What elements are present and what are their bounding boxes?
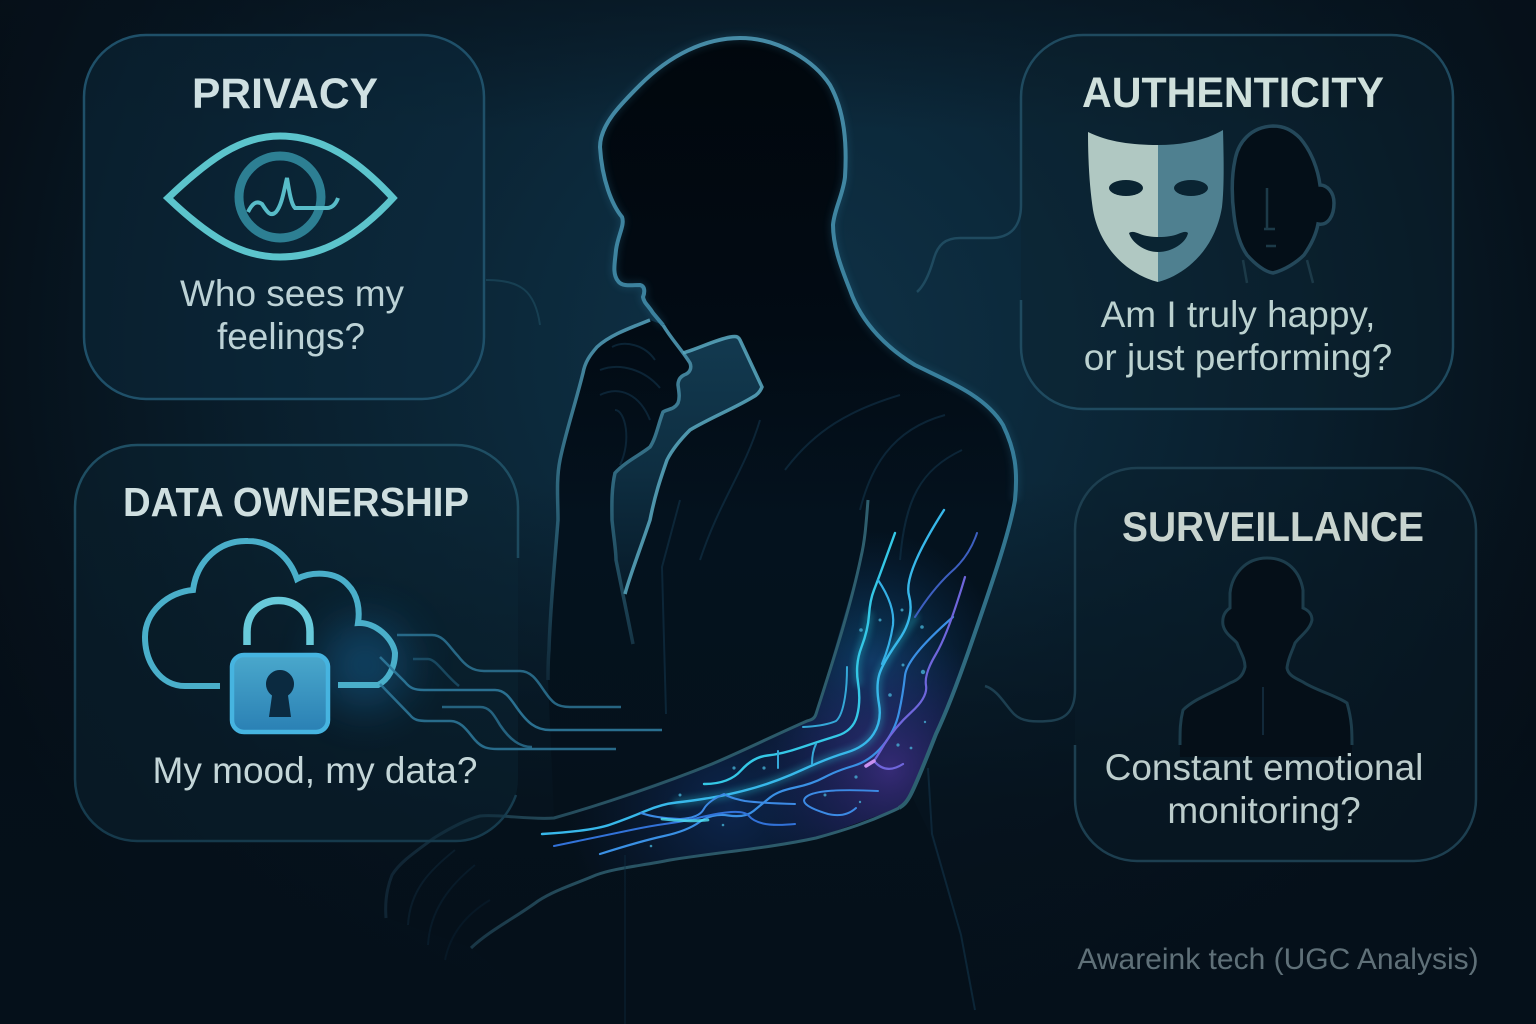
body fill — [386, 38, 1016, 1024]
forearm colour wash — [600, 550, 976, 868]
data lines — [380, 635, 662, 749]
credit: Awareink tech (UGC Analysis) — [1077, 943, 1479, 976]
heading: surveillance: SURVEILLANCE — [1122, 503, 1424, 550]
horizontal branches — [641, 790, 878, 819]
panel: authenticity — [917, 35, 1453, 409]
fingers — [612, 325, 691, 644]
text: am I truly happy: or just performing? — [1084, 337, 1392, 378]
cloud glow — [320, 620, 410, 710]
panel outline with connector — [985, 468, 1476, 861]
lower branches — [554, 812, 795, 846]
text: who sees my feelings: Who sees my — [180, 273, 405, 314]
neck and collar outline — [625, 336, 762, 594]
panel: data ownership — [75, 445, 518, 841]
outline glow — [600, 38, 1016, 500]
panel outline with connector — [917, 35, 1453, 409]
top darkening — [0, 0, 1536, 130]
icon: eye with pulse — [168, 136, 393, 257]
icon: watched figure — [1180, 558, 1352, 757]
panel: privacy — [84, 35, 484, 399]
cyan branch — [878, 580, 893, 664]
second cyan vein — [704, 533, 895, 784]
icon: mask and head — [1088, 126, 1334, 283]
panel outline — [75, 445, 518, 841]
heading: data ownership: DATA OWNERSHIP — [123, 479, 469, 525]
bottom darkening — [0, 480, 1536, 1024]
upper forearm and hand edge — [386, 500, 868, 918]
vein highlight violet — [866, 761, 874, 766]
vein glow — [676, 615, 915, 802]
blue vein right — [600, 617, 953, 854]
arm sparkle dots — [650, 608, 926, 847]
heading: authenticity: AUTHENTICITY — [1082, 69, 1384, 117]
arm veins — [542, 510, 977, 854]
raised arm outline — [548, 320, 650, 680]
head, shoulder and arm outline — [600, 38, 1016, 808]
icon: cloud with padlock — [145, 541, 410, 732]
gap between hand and neck — [612, 336, 762, 594]
text: constant emotional monitoring: Constant emotional — [1105, 747, 1423, 788]
short upper branches — [778, 667, 847, 768]
text: who sees my feelings: feelings? — [217, 316, 365, 357]
purple vein side — [874, 577, 965, 769]
text: constant emotional monitoring: monitoring? — [1167, 790, 1361, 831]
main cyan vein — [542, 510, 944, 834]
purple vein top — [915, 533, 977, 617]
heading: privacy: PRIVACY — [192, 70, 378, 118]
person silhouette — [386, 38, 1040, 1024]
head beside mask — [1232, 126, 1334, 273]
panel: surveillance — [985, 468, 1476, 861]
connector: privacy — [486, 280, 540, 325]
faint body lines — [408, 344, 975, 1024]
text: my mood my data: My mood, my data? — [153, 750, 477, 791]
lower arm edge — [471, 808, 899, 948]
text: am I truly happy: Am I truly happy, — [1101, 294, 1375, 335]
vein highlight — [662, 819, 708, 821]
